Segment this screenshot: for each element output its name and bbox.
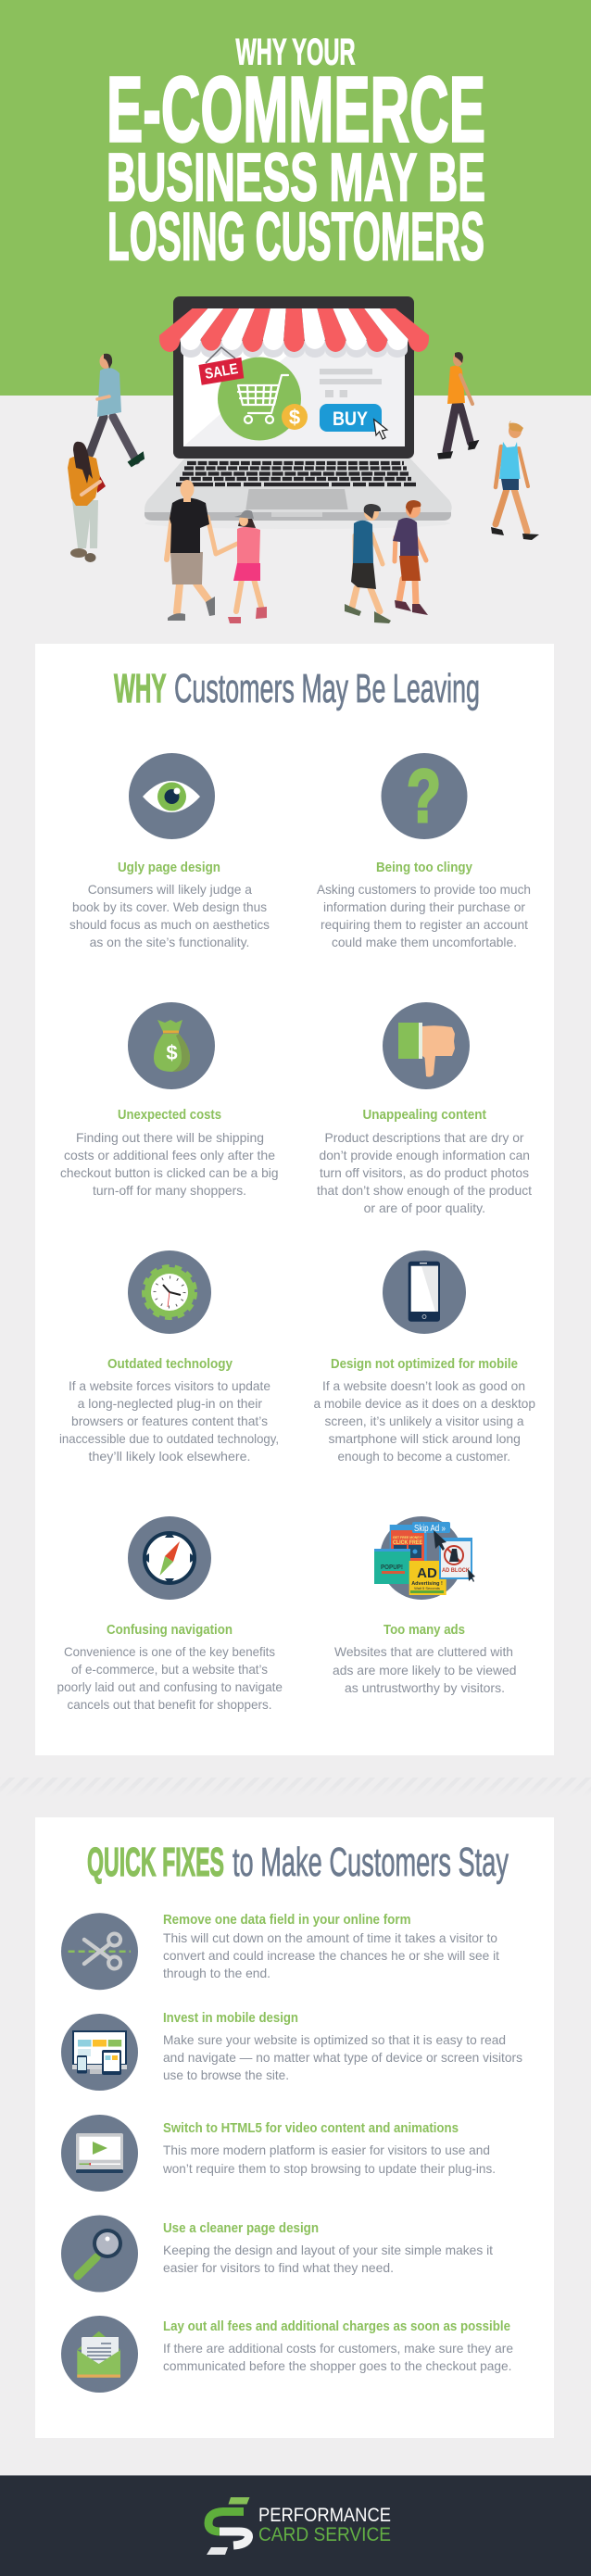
icon: pop-up ads: POPUP! <box>381 1564 403 1571</box>
title: WHY YOUR <box>235 31 356 72</box>
icon: mouse cursor <box>374 420 387 439</box>
fix: use a cleaner page design <box>61 2216 493 2292</box>
fix text: Make sure your website is optimized so that it is easy to read <box>163 2032 506 2047</box>
item: design not optimized for mobile <box>313 1250 535 1464</box>
fix text: won’t require them to stop browsing to update their plug-ins. <box>162 2161 496 2176</box>
fix text: This will cut down on the amount of time it takes a visitor to <box>163 1930 497 1945</box>
item text: costs or additional fees only after the <box>64 1148 275 1162</box>
item: too many ads <box>333 1516 517 1695</box>
fix heading: Use a cleaner page design <box>163 2221 319 2236</box>
icon: magnifying glass <box>61 2216 138 2292</box>
icon: question mark <box>382 753 467 839</box>
person: girl in pink <box>228 510 267 623</box>
illustration: laptop storefront <box>145 296 452 529</box>
fix text: easier for visitors to find what they need. <box>163 2260 394 2275</box>
icon: compass <box>128 1516 211 1600</box>
item text <box>313 1378 535 1464</box>
item text: Asking customers to provide too much <box>317 882 531 897</box>
laptop keyboard <box>176 463 416 484</box>
fix text <box>163 2032 522 2082</box>
icon: pop-up ads: Wait 5 Seconds <box>414 1586 440 1590</box>
item heading: Unexpected costs <box>118 1108 221 1123</box>
item text: browsers or features content that’s <box>71 1414 268 1428</box>
icon: question mark: ? <box>407 755 441 838</box>
item text <box>57 1644 283 1712</box>
item: confusing navigation <box>57 1516 283 1712</box>
icon: video player <box>61 2115 138 2192</box>
fix: lay out all fees <box>61 2316 513 2393</box>
item text: Websites that are cluttered with <box>334 1644 513 1659</box>
item text: Convenience is one of the key benefits <box>64 1644 275 1659</box>
item text: smartphone will stick around long <box>328 1431 521 1446</box>
item heading: Being too clingy <box>376 861 472 875</box>
item text: checkout button is clicked can be a big <box>60 1165 278 1180</box>
item text: Product descriptions that are dry or <box>324 1130 524 1145</box>
item text: poorly laid out and confusing to navigate <box>57 1679 283 1694</box>
heading: quick fixes to make customers stay <box>87 1841 509 1885</box>
item text: they’ll likely look elsewhere. <box>89 1449 250 1464</box>
icon: pop-up ads: AD <box>417 1565 437 1581</box>
person: man in black shirt <box>167 480 237 621</box>
item text: ads are more likely to be viewed <box>333 1663 517 1678</box>
item text: a mobile device as it does on a desktop <box>313 1396 535 1411</box>
item text <box>333 1644 517 1695</box>
icon: money bag: $ <box>166 1041 178 1064</box>
item: outdated technology <box>59 1250 279 1464</box>
item text: that don’t show enough of the product <box>317 1183 532 1198</box>
item text: or are of poor quality. <box>364 1200 485 1215</box>
item text: If a website forces visitors to update <box>69 1378 270 1393</box>
icon: pop-up ads: AD BLOCK <box>442 1568 471 1574</box>
laptop base <box>145 459 452 521</box>
item text: should focus as much on aesthetics <box>69 917 270 932</box>
heading: quick fixes to make customers stay: QUICK FIXES <box>87 1841 224 1885</box>
logo mark <box>207 2497 250 2555</box>
heading: why customers may be leaving: WHY <box>114 667 167 711</box>
icon: envelope with letter <box>61 2316 138 2393</box>
title <box>107 31 485 274</box>
item text <box>317 882 531 949</box>
person: woman in teal top <box>491 421 539 540</box>
icon: dollar coin: $ <box>289 406 300 429</box>
person: man in blue shirt <box>90 354 144 466</box>
icon: eye <box>129 753 215 839</box>
icon: pop-up ads: CLICK FREE <box>393 1540 422 1546</box>
item text: of e-commerce, but a website that’s <box>71 1662 268 1677</box>
logo wordmark: CARD SERVICE <box>258 2523 391 2545</box>
logo wordmark <box>258 2504 391 2545</box>
fix text: convert and could increase the chances he or she will see it <box>163 1948 499 1963</box>
footer <box>0 2475 591 2576</box>
item text: screen, it’s unlikely a visitor using a <box>324 1414 524 1428</box>
item text <box>60 1130 278 1198</box>
item text <box>59 1378 279 1464</box>
fix text: through to the end. <box>163 1966 270 1980</box>
item text: Consumers will likely judge a <box>88 882 252 897</box>
item text: requiring them to register an account <box>321 917 528 932</box>
icon: sale tag: SALE <box>204 361 240 383</box>
item text: cancels out that benefit for shoppers. <box>67 1697 272 1712</box>
icon: pop-up ads: Skip Ad » <box>414 1524 446 1534</box>
buy button <box>320 404 382 432</box>
item text: If a website doesn’t look as good on <box>322 1378 525 1393</box>
logo wordmark: PERFORMANCE <box>258 2504 391 2526</box>
fix heading: Invest in mobile design <box>163 2011 298 2026</box>
item text: Finding out there will be shipping <box>76 1130 264 1145</box>
item text <box>317 1130 532 1215</box>
item text: inaccessible due to outdated technology, <box>59 1431 279 1446</box>
fix: remove one data field <box>61 1913 499 1990</box>
awning <box>159 308 429 358</box>
fix text: Keeping the design and layout of your site simple makes it <box>163 2243 493 2257</box>
icon: pop-up ads: GET FREE MONEY! <box>393 1535 422 1539</box>
fix: invest in mobile design <box>61 2011 522 2091</box>
buy button: BUY <box>333 408 368 430</box>
item heading: Ugly page design <box>118 861 220 875</box>
panel: quick fixes <box>35 1817 554 2438</box>
fix text <box>163 1930 499 1980</box>
item text: turn off visitors, as do product photos <box>320 1165 529 1180</box>
icon: dollar coin <box>282 404 308 430</box>
item: being too clingy <box>317 753 531 949</box>
fix text <box>163 2243 493 2275</box>
fix text: If there are additional costs for customers, make sure they are <box>163 2341 513 2356</box>
panel: why customers may be leaving <box>35 644 554 1755</box>
person: boy in purple shirt <box>393 500 428 615</box>
icon: gear clock <box>128 1250 211 1334</box>
person: woman in orange top <box>68 442 106 562</box>
icon: money bag <box>128 1002 215 1089</box>
item heading: Design not optimized for mobile <box>331 1357 518 1372</box>
person: boy in blue shirt <box>345 504 391 623</box>
person: man in orange shirt <box>438 352 478 459</box>
laptop lid and screen <box>173 296 414 459</box>
icon: thumbs down <box>383 1002 470 1089</box>
icon: sale tag <box>198 347 244 385</box>
item heading: Outdated technology <box>107 1357 233 1372</box>
item text: don’t provide enough information can <box>319 1148 530 1162</box>
icon: green cart circle <box>218 358 301 441</box>
fix heading: Lay out all fees and additional charges as soon as possible <box>163 2319 510 2334</box>
item text: book by its cover. Web design thus <box>72 899 267 914</box>
fix text: use to browse the site. <box>163 2067 289 2082</box>
item text: turn-off for many shoppers. <box>93 1183 246 1198</box>
fix heading: Remove one data field in your online form <box>163 1913 411 1928</box>
item: unappealing content <box>317 1002 532 1215</box>
item text <box>69 882 270 949</box>
product listing placeholders <box>320 369 382 397</box>
fix text: communicated before the shopper goes to the checkout page. <box>163 2358 511 2373</box>
icon: pop-up ads: Advertising ! <box>411 1581 443 1587</box>
item heading: Too many ads <box>384 1623 465 1638</box>
icon: scissors <box>61 1913 138 1990</box>
item text: as on the site’s functionality. <box>90 935 249 949</box>
fix text <box>162 2142 496 2176</box>
item text: information during their purchase or <box>323 899 525 914</box>
item: ugly page design <box>69 753 270 949</box>
item text: could make them uncomfortable. <box>332 935 517 949</box>
item heading: Unappealing content <box>363 1108 486 1123</box>
item text: as untrustworthy by visitors. <box>345 1680 505 1695</box>
panel: green hero background <box>0 0 591 396</box>
heading: why customers may be leaving <box>114 667 480 711</box>
fix text <box>163 2341 513 2373</box>
item: unexpected costs <box>60 1002 278 1198</box>
item text: enough to become a customer. <box>337 1449 510 1464</box>
fix text: This more modern platform is easier for visitors to use and <box>163 2142 490 2157</box>
fix text: and navigate — no matter what type of device or screen visitors <box>163 2050 522 2065</box>
item heading: Confusing navigation <box>107 1623 233 1638</box>
icon: smartphone <box>383 1250 466 1334</box>
icon: responsive devices <box>61 2014 138 2091</box>
fix: switch to HTML5 <box>61 2115 496 2192</box>
fix heading: Switch to HTML5 for video content and animations <box>163 2121 459 2136</box>
item text: a long-neglected plug-in on their <box>78 1396 262 1411</box>
icon: pop-up ads <box>374 1516 475 1600</box>
